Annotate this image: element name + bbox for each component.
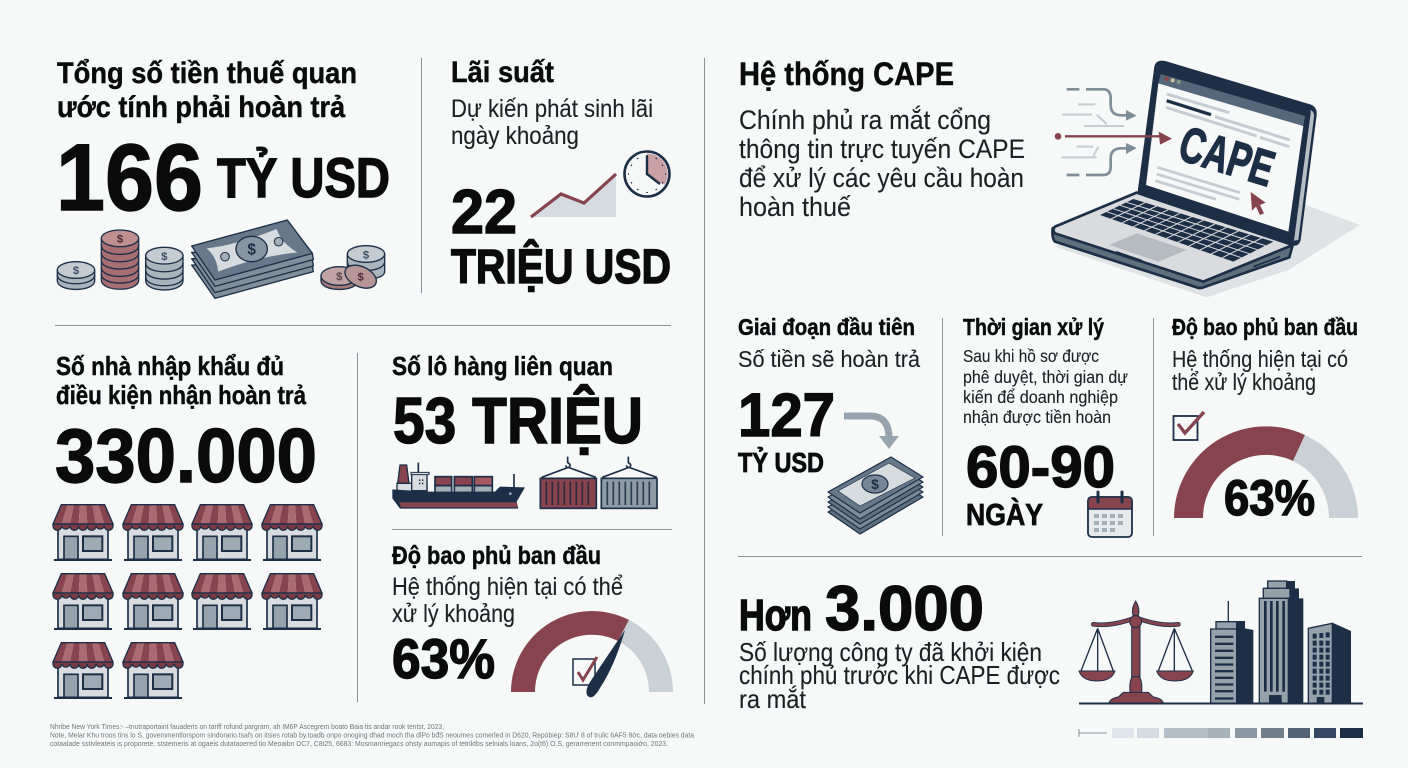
icon: calendar <box>1088 492 1132 537</box>
number: more than 3,000: Hơn <box>739 591 812 640</box>
text: CAPE description <box>739 104 1025 222</box>
icon: small coins: $ <box>358 272 365 284</box>
text: coverage description: xử lý khoảng <box>392 600 515 628</box>
divider: top left vertical <box>420 58 422 293</box>
divider: main vertical <box>704 58 706 704</box>
icon: coin stacks <box>57 230 183 290</box>
icon: laptop with CAPE portal: CAPE <box>1173 116 1281 197</box>
number: 127 billion USD: TỶ USD <box>738 446 824 478</box>
icon grid: storefronts <box>53 505 322 698</box>
panel: initial coverage right <box>1172 314 1358 526</box>
panel: first phase <box>738 314 923 534</box>
panel: interest <box>451 56 671 294</box>
number: 166 billion USD <box>56 125 390 231</box>
icon: office buildings <box>1211 581 1351 703</box>
icon: cash stack: $ <box>871 476 879 492</box>
heading: processing time: Thời gian xử lý <box>963 314 1104 340</box>
divider: phase and processing <box>942 318 944 536</box>
text: lawsuits description: chính phủ trước khi CAPE được <box>739 660 1060 690</box>
number: more than 3,000: 3.000 <box>825 574 984 644</box>
footer: source notes <box>50 722 695 748</box>
heading: first phase: Giai đoạn đầu tiên <box>738 314 915 340</box>
number: 22 million USD: TRIỆU USD <box>451 239 671 294</box>
text: processing description: Sau khi hồ sơ được <box>963 346 1099 366</box>
text: processing description: phê duyệt, thời gian dự <box>963 367 1128 387</box>
heading: total refund <box>57 57 357 124</box>
icon: cash stack <box>828 457 923 534</box>
number: 166 billion USD: TỶ USD <box>217 146 390 209</box>
text: coverage description: thể xử lý khoảng <box>1172 369 1316 395</box>
panel: eligible importers <box>53 351 322 698</box>
text: CAPE description: để xử lý các yêu cầu hoàn <box>739 163 1024 193</box>
heading: eligible importers: điều kiện nhận hoàn trả <box>56 380 306 410</box>
chart: semicircle gauge <box>1174 426 1358 518</box>
number: 63 percent: 63% <box>392 627 495 690</box>
heading: interest: Lãi suất <box>451 56 554 89</box>
heading: shipments: Số lô hàng liên quan <box>392 351 613 381</box>
icon: scales of justice <box>1079 601 1193 703</box>
icon: checkbox <box>1174 412 1204 440</box>
icon: coin stacks: $ <box>73 265 80 277</box>
text: lawsuits description: ra mắt <box>739 684 807 714</box>
footer: source notes: cotaalade sstivleateis is proporete. ststemeris at ogaeis dutataoered tio Meoaibn DC7, C8t25, 6683: Mosmanriegacs ohsty aumapis of tetriktbs selnials loans, 2o(t6) O.S, gerarrenent conmmpaoiớo, 2023. <box>50 739 668 748</box>
chart: gauge with needle <box>511 611 673 697</box>
text: interest description <box>451 95 653 150</box>
arrow: down to cash <box>844 416 899 449</box>
number: 22 million USD <box>451 178 671 294</box>
ground line <box>1079 702 1363 704</box>
heading: initial coverage: Độ bao phủ ban đầu <box>392 542 601 570</box>
number: 22 million USD: 22 <box>451 178 517 247</box>
heading: initial coverage: Độ bao phủ ban đầu <box>1172 314 1358 340</box>
text: coverage description <box>392 573 623 628</box>
panel: total refund <box>56 57 390 298</box>
chart: rising interest line <box>531 174 616 217</box>
divider: shipments and coverage <box>392 528 672 530</box>
icon: coin stacks: $ <box>117 234 124 246</box>
icon: small coins: $ <box>363 249 370 261</box>
panel: lawsuits <box>739 574 1363 738</box>
number: 166 billion USD: 166 <box>56 125 203 231</box>
text: coverage description <box>1172 346 1348 395</box>
text: processing description: kiến để doanh nghiệp <box>963 387 1118 407</box>
heading: CAPE system: Hệ thống CAPE <box>739 56 954 92</box>
legend strip: shades <box>1079 728 1363 738</box>
number: 127 billion USD <box>738 381 835 478</box>
icon: cargo ship <box>392 463 525 509</box>
text: CAPE description: Chính phủ ra mắt cổng <box>739 104 991 135</box>
text: coverage description: Hệ thống hiện tại có <box>1172 346 1348 372</box>
icon: arrows into laptop <box>1055 89 1172 175</box>
number: 60-90 days: NGÀY <box>966 497 1043 532</box>
divider: processing and coverage <box>1152 318 1154 536</box>
number: 60-90 days <box>966 435 1115 532</box>
text: CAPE description: thông tin trực tuyến CAPE <box>739 134 1025 164</box>
divider: right horizontal <box>738 556 1362 558</box>
number: 63 percent: 63% <box>1224 470 1315 526</box>
footer: source notes: Note, Melar Khu troos tins lo S, govemmentlorspom sindorario.tsafs on itsies rotab by.toadb onpo onoging dhad moch tha dlPo bđS neoumes comerled in D620, Repóbiep: S8Ư 8 of trulic 6AF5 8ớc, data oebies data <box>50 730 695 740</box>
icon: clock <box>624 152 670 196</box>
heading: eligible importers: Số nhà nhập khẩu đủ <box>56 351 284 381</box>
heading: total refund: Tổng số tiền thuế quan <box>57 57 357 90</box>
text: interest description: ngày khoảng <box>451 122 579 150</box>
icon: hanging containers <box>540 457 657 508</box>
text: CAPE description: hoàn thuế <box>739 192 851 222</box>
icon: laptop with CAPE portal <box>1052 61 1360 297</box>
heading: eligible importers <box>56 351 306 410</box>
text: coverage description: Hệ thống hiện tại có thể <box>392 573 623 601</box>
panel: processing time <box>963 314 1132 537</box>
number: 53 million: 53 TRIỆU <box>393 384 643 457</box>
text: interest description: Dự kiến phát sinh lãi <box>451 95 653 123</box>
text: refund amount: Số tiền sẽ hoàn trả <box>738 346 920 372</box>
icon: small coins <box>321 246 385 293</box>
divider: left horizontal <box>55 324 671 326</box>
icon: coin stacks: $ <box>161 251 168 263</box>
panel: initial coverage left <box>392 542 673 697</box>
text: processing description <box>963 346 1128 427</box>
footer: source notes: Nhribe New York Times:- –tnutraportaint fauaderis on tariff rofund pargram, ah IM6P Ascegrem boato Baia tis andar rook tentst, 2023, <box>50 722 444 731</box>
heading: total refund: ước tính phải hoàn trả <box>57 91 345 124</box>
panel: shipments <box>392 351 657 509</box>
panel: CAPE system <box>739 56 1360 297</box>
number: 60-90 days: 60-90 <box>966 435 1115 500</box>
text: processing description: nhận được tiền hoàn <box>963 407 1111 427</box>
icon: cash stack <box>192 220 313 298</box>
text: lawsuits description <box>739 637 1060 714</box>
number: more than 3,000 <box>739 574 984 644</box>
divider: lower left vertical <box>356 353 358 702</box>
number: 127 billion USD: 127 <box>738 381 835 449</box>
icon: small coins: $ <box>336 271 343 283</box>
icon: cash stack: $ <box>247 241 256 258</box>
number: 330,000: 330.000 <box>55 414 317 499</box>
text: lawsuits description: Số lượng công ty đã khởi kiện <box>739 637 1042 667</box>
